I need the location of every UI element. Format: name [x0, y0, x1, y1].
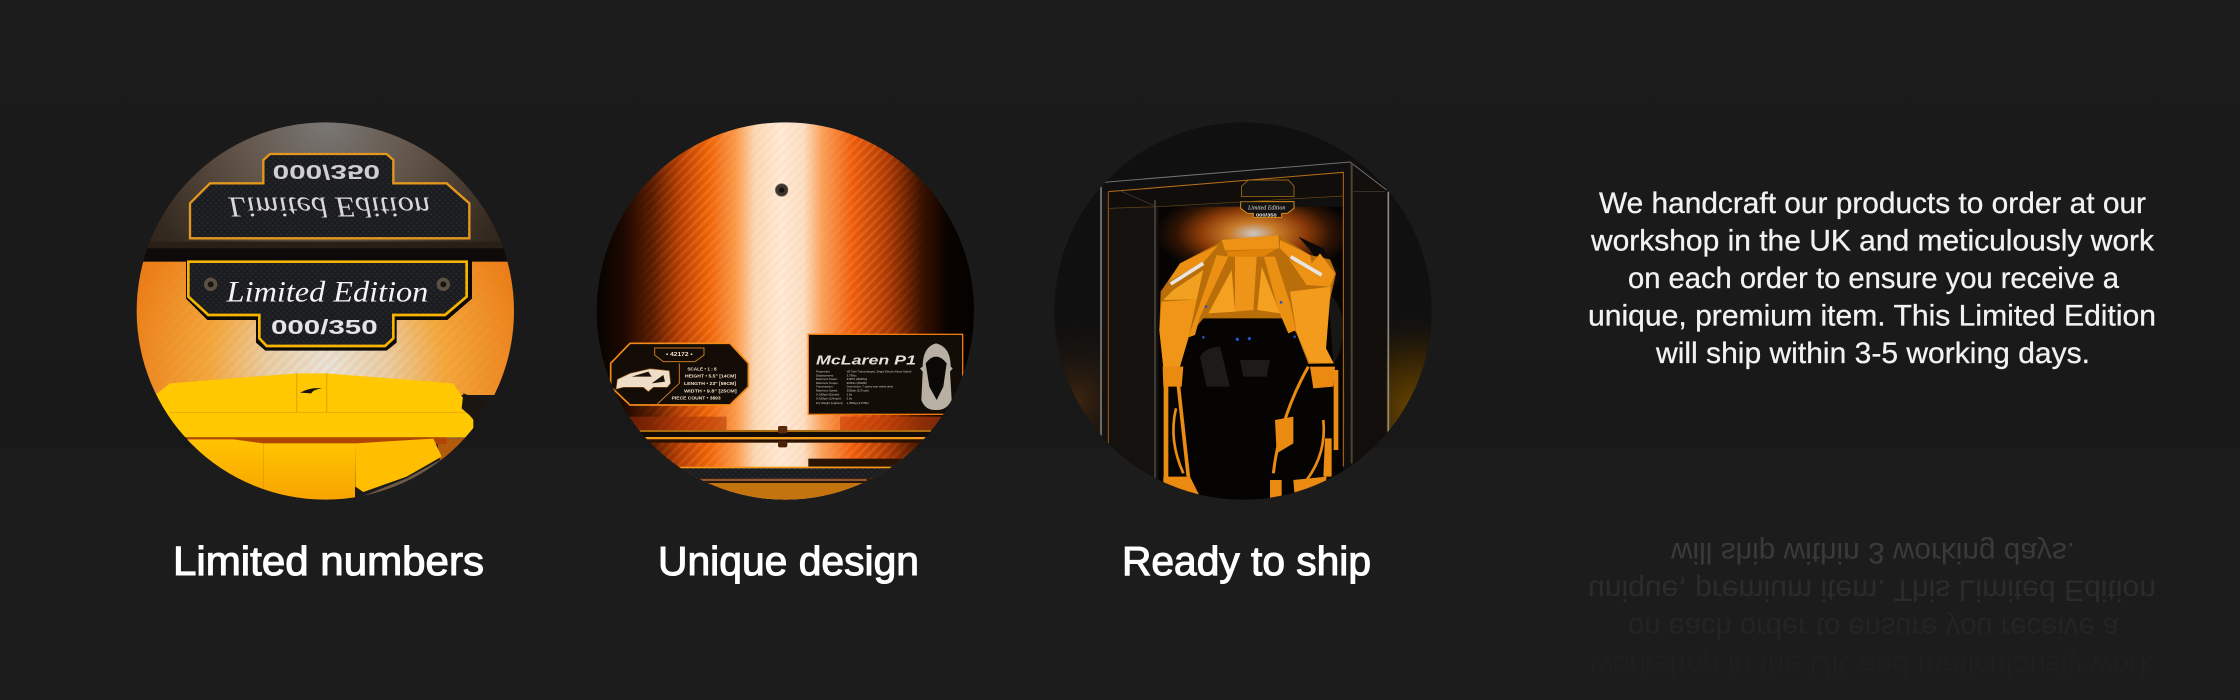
screws	[204, 278, 450, 291]
limited edition plaque	[186, 257, 472, 351]
paragraph floor reflection: on each order to ensure you receive a	[1628, 611, 2119, 644]
paragraph floor reflection: unique, premium item. This Limited Edition	[1588, 574, 2156, 606]
plaque spec table: 1,395kg (3,075lb)	[847, 401, 869, 405]
icon: car top view	[920, 343, 953, 410]
plaque stats: HEIGHT • 5.5" [14CM]	[685, 374, 736, 380]
car rear wheel	[1330, 296, 1343, 362]
reflected script: Limited Edition	[227, 190, 430, 221]
plaque stats: WIDTH • 9.8" [25CM]	[684, 388, 737, 394]
plaque stats: SCALE • 1 : 8	[687, 366, 717, 372]
plaque spec table: 3,799cc	[847, 373, 857, 377]
yellow car bodywork	[156, 373, 474, 500]
caption: ready to ship: Ready to ship	[1122, 538, 1371, 584]
flame gradient backdrop	[593, 120, 980, 503]
plaque spec table: 0-200kph (124mph):	[816, 397, 842, 401]
description paragraph	[1588, 187, 2156, 370]
acrylic case frame	[1101, 162, 1388, 497]
plaque spec table	[816, 369, 912, 405]
lower shelf reflection	[629, 416, 942, 500]
blue pin details	[1202, 301, 1296, 341]
description paragraph: will ship within 3-5 working days.	[1655, 337, 2090, 370]
plaque spec table: Dual clutch, 7 speed rear wheel drive	[847, 385, 894, 389]
specification plaque right	[808, 334, 963, 414]
specification plaque left	[611, 343, 748, 405]
background wall	[0, 0, 2240, 448]
edition number: 000/350	[271, 317, 378, 339]
plaque spec table: Displacement:	[816, 373, 834, 377]
miniature plaque: 000/350	[1256, 212, 1277, 217]
plaque spec table: Powertrain:	[816, 369, 831, 373]
lower orange parts	[1163, 367, 1335, 500]
white suspension struts	[1171, 257, 1322, 284]
case back panel	[1158, 207, 1343, 500]
lower chassis arms	[1166, 367, 1336, 483]
car underbody	[1183, 317, 1317, 500]
paragraph floor reflection	[1588, 536, 2156, 682]
plaque spec table: Dry Weight (Lightest):	[816, 401, 844, 405]
description paragraph: We handcraft our products to order at our	[1599, 187, 2146, 220]
plaque spec table: 916PS (903bhp)	[847, 377, 867, 381]
plaque spec table: Maximum Power:	[816, 377, 838, 381]
car orange bodywork	[1159, 235, 1342, 367]
plaque spec table: 900Nm (664lbft)	[847, 381, 867, 385]
script title: Limited Edition	[226, 277, 428, 309]
reflected number: 000/350	[273, 160, 380, 182]
caption: unique design: Unique design	[658, 538, 919, 584]
mounting screw	[775, 184, 788, 196]
display case back panel reflection	[150, 122, 501, 242]
caption: limited numbers: Limited numbers	[173, 538, 484, 584]
plaque spec table: Transmission:	[816, 385, 834, 389]
backdrop glow	[1160, 206, 1343, 261]
background floor	[0, 448, 2240, 700]
dark shelf band	[133, 242, 520, 262]
plaque stats: LENGTH • 23" [59CM]	[684, 381, 736, 387]
case side panels	[1102, 340, 1387, 460]
icon: car side view	[616, 369, 671, 392]
miniature plaque	[1241, 180, 1294, 217]
plaque spec table: 6.8s	[847, 397, 853, 401]
description paragraph: on each order to ensure you receive a	[1628, 262, 2119, 295]
plaque stats	[672, 368, 736, 400]
plaque spec table: 0-100kph (62mph):	[816, 393, 840, 397]
reflected plaque	[190, 154, 469, 238]
plaque model number: • 42172 •	[666, 352, 693, 358]
plaque spec table: Maximum Torque:	[816, 381, 839, 385]
paragraph floor reflection: will ship within 3 working days.	[1670, 536, 2075, 569]
photo: limited edition plaques	[133, 120, 520, 507]
engine cover sheen	[1200, 347, 1270, 387]
plaque spec table: 2.8s	[847, 393, 853, 397]
orange carbon backdrop	[133, 262, 520, 395]
dark studio backdrop	[1054, 122, 1432, 470]
McLaren P1 logo: McLaren P1	[816, 354, 916, 368]
plaque stats: PIECE COUNT • 3893	[672, 396, 721, 402]
photo: model in display case	[1050, 120, 1437, 503]
description paragraph: workshop in the UK and meticulously work	[1590, 224, 2155, 258]
photo: carbon fibre backdrop with plaques	[593, 120, 980, 503]
plaque spec table: Maximum Speed:	[816, 389, 838, 393]
case top panel	[1108, 172, 1343, 208]
plaque spec table: 350kph (217mph)	[847, 389, 869, 393]
infographic canvas	[136, 122, 2154, 640]
plaque spec table: V8 Twin Turbocharged, Single Electric Motor Hybrid	[847, 369, 912, 373]
miniature plaque: Limited Edition	[1247, 204, 1286, 211]
description paragraph: unique, premium item. This Limited Edition	[1588, 300, 2156, 332]
paragraph floor reflection: workshop in the UK and meticulously work	[1590, 648, 2155, 682]
